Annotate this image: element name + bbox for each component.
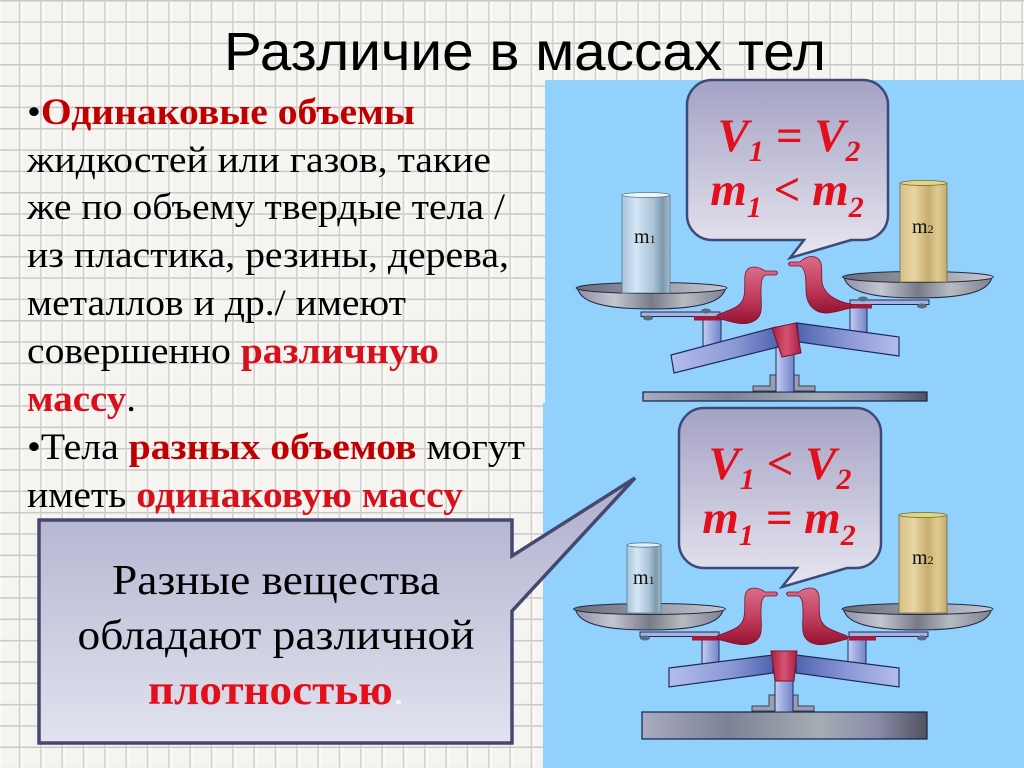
base plate [642,712,927,739]
speech bubble: V1 = V2, m1 < m2: < [762,164,812,216]
left post [703,316,721,348]
cylinder m2 [900,180,947,282]
left bird [717,267,778,324]
text block: main explanation: совершенно различную [27,331,439,372]
callout: substances differ in density: Разные вещества [112,558,440,604]
stand foot [753,375,815,391]
right beam [796,655,899,687]
speech bubble: V1 = V2, m1 < m2 [687,80,888,258]
text block: main explanation: иметь одинаковую массу [27,475,464,516]
left beam [669,655,773,687]
speech bubble: V1 < V2, m1 = m2: 1 [739,519,754,552]
right post [848,637,866,665]
text block: main explanation [26,92,525,516]
right pan support [850,296,929,308]
centre hub [772,323,801,357]
text block: main explanation: из пластика, резины, дерева, [27,235,509,276]
cylinder m2 [899,512,947,613]
speech bubble: V1 < V2, m1 = m2: 2 [836,463,852,496]
speech bubble: V1 = V2, m1 < m2: 1 [749,135,764,168]
right pan [842,272,994,298]
left pan support [640,632,719,640]
text block: main explanation: •Тела разных объемов могут [27,427,525,468]
text block: main explanation: массу. [27,379,136,420]
diagram: lower balance scale [574,408,993,739]
speech bubble: V1 = V2, m1 < m2: m [710,164,747,216]
speech bubble: V1 < V2, m1 = m2: 1 [740,463,755,496]
text block: main explanation: же по объему твердые тела / [26,187,506,228]
panel: lower blue background [543,403,1024,768]
left pan support [641,308,721,320]
speech bubble: V1 = V2, m1 < m2: 2 [848,191,864,224]
left pan [574,604,726,630]
cylinder m1: m1 [633,567,655,589]
speech bubble: V1 = V2, m1 < m2: 2 [845,135,861,168]
cylinder m1 [622,192,670,293]
base plate [643,392,927,401]
centre post [775,680,793,712]
callout: substances differ in density [39,478,635,743]
speech bubble: V1 = V2, m1 < m2: V [717,110,749,162]
callout: substances differ in density: обладают различной [78,613,474,659]
speech bubble: V1 = V2, m1 < m2: = [764,110,814,162]
speech bubble: V1 < V2, m1 = m2: V [708,438,740,490]
right bird [786,588,847,645]
speech bubble: V1 < V2, m1 = m2 [679,408,881,587]
speech bubble: V1 < V2, m1 = m2: V [805,438,837,490]
centre post [776,345,794,392]
right bird [788,256,851,313]
speech bubble: V1 < V2, m1 = m2: < [755,438,805,490]
title: Различие в массах тел [224,22,826,82]
text block: main explanation: металлов и др./ имеют [27,283,406,324]
speech bubble: V1 < V2, m1 = m2: 2 [840,519,856,552]
left beam [671,327,778,373]
text block: main explanation: •Одинаковые объемы [27,92,415,133]
diagram: upper balance scale [576,80,994,401]
cylinder m1: m1 [634,226,656,248]
right post [850,306,867,334]
right beam [797,323,899,356]
text block: main explanation: жидкостей или газов, такие [26,140,491,181]
stand foot [752,695,814,711]
left pan [576,282,727,309]
speech bubble: V1 < V2, m1 = m2: = [754,492,804,544]
speech bubble: V1 = V2, m1 < m2: 1 [747,191,762,224]
speech bubble: V1 = V2, m1 < m2: m [812,164,849,216]
speech bubble: V1 < V2, m1 = m2: m [804,492,841,544]
left bird [717,588,778,645]
panel: upper blue background [545,80,1024,405]
cylinder m1 [627,543,661,613]
callout: substances differ in density: плотностью . [148,668,404,714]
cylinder m2: m2 [912,216,934,238]
speech bubble: V1 = V2, m1 < m2: V [814,110,846,162]
speech bubble: V1 < V2, m1 = m2: m [702,492,739,544]
right pan [842,604,993,630]
right pan support [849,632,928,640]
cylinder m2: m2 [912,547,934,569]
left post [702,637,719,665]
centre hub [771,651,797,681]
